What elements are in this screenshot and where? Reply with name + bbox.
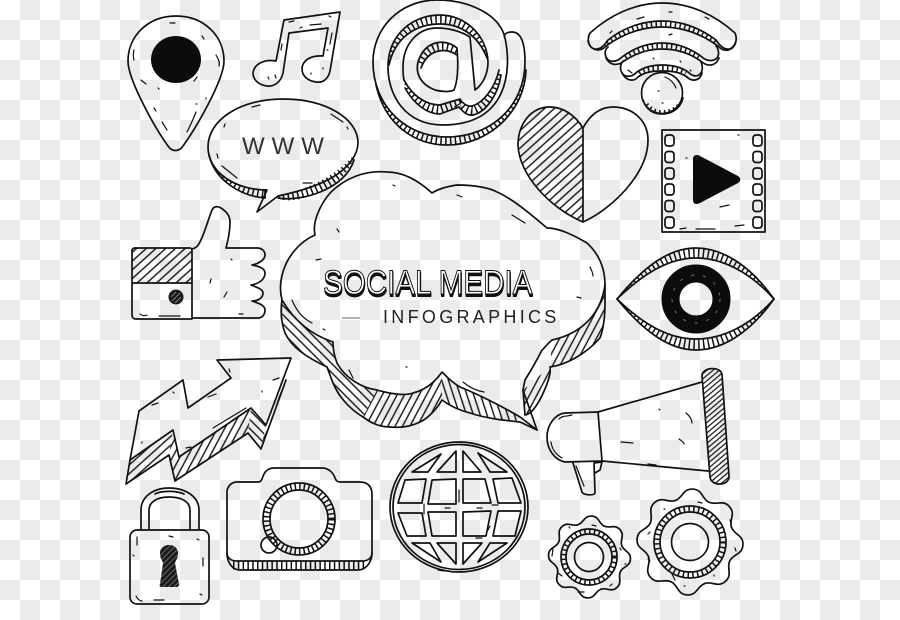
title: social media: SOCIAL MEDIA — [323, 264, 532, 302]
wifi inner band — [621, 61, 702, 80]
play triangle — [693, 155, 740, 204]
icon: wifi — [588, 3, 736, 114]
cloud hatched rim — [282, 285, 605, 427]
subtitle: infographics: INFOGRAPHICS — [383, 307, 560, 327]
megaphone bell — [702, 369, 729, 484]
wifi outer band — [588, 3, 736, 50]
icon: half-hatched heart — [518, 107, 648, 222]
globe grid cells — [398, 451, 521, 564]
wifi dot — [642, 72, 683, 114]
cuff — [132, 248, 192, 319]
lock shackle — [141, 488, 199, 529]
icon: at sign — [373, 0, 526, 145]
icon: megaphone — [547, 369, 729, 495]
icon: large gear — [634, 486, 746, 598]
icon: camera — [227, 468, 372, 570]
icon: padlock — [130, 488, 209, 604]
icon: growth arrow — [126, 358, 291, 484]
camera lens — [263, 483, 335, 555]
label: www: WWW — [242, 133, 331, 160]
icon: music note — [253, 12, 340, 86]
icon: small gear — [546, 514, 633, 600]
eye iris — [670, 274, 722, 324]
film sprockets — [665, 135, 762, 228]
megaphone handle — [573, 462, 602, 495]
wifi middle band — [605, 43, 719, 65]
icon: thumbs up — [132, 207, 265, 319]
icon: www speech bubble — [208, 99, 358, 212]
icon: eye — [617, 248, 774, 350]
arrow hatched side — [126, 380, 286, 484]
hand — [192, 207, 265, 318]
keyhole — [160, 545, 179, 587]
icon: map pin — [128, 16, 224, 150]
icon: video film strip — [662, 130, 765, 232]
cloud outline — [281, 172, 605, 430]
icon: globe — [390, 442, 528, 572]
central cloud speech bubble — [281, 172, 605, 430]
